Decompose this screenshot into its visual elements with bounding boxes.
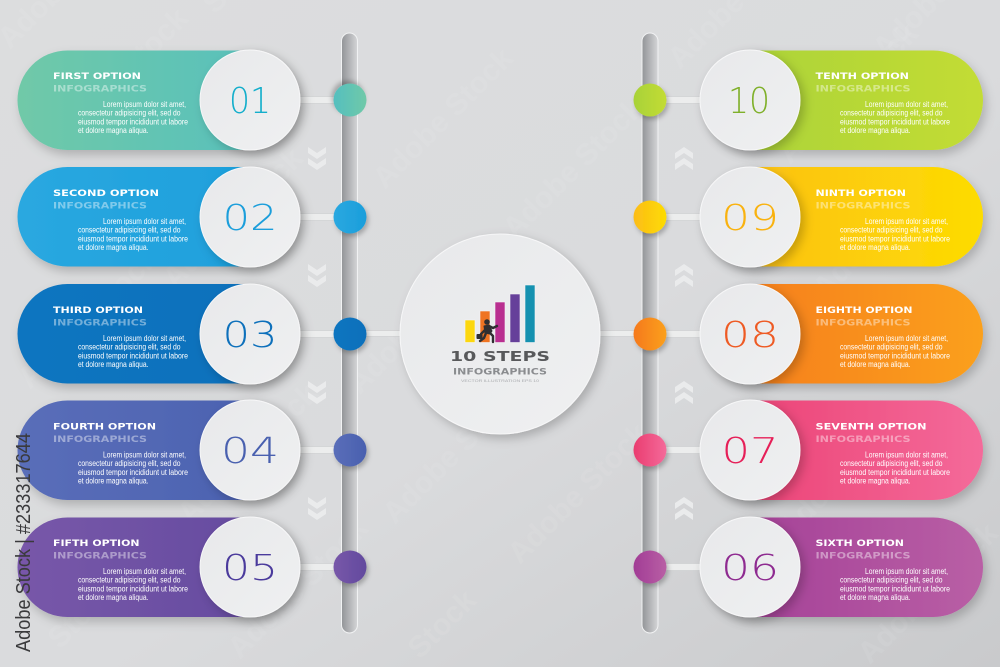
body text: eiusmod tempor incididunt ut labore [840, 117, 950, 126]
connector [660, 564, 705, 570]
body text [840, 334, 950, 369]
body text: Lorem ipsum dolor sit amet, [865, 100, 948, 109]
watermark pattern: Adobe Stock [772, 392, 925, 545]
body text [840, 100, 950, 135]
hub caption: VECTOR ILLUSTRATION EPS 10 [461, 379, 539, 383]
hub subtitle: INFOGRAPHICS [453, 368, 547, 378]
connector [295, 96, 340, 104]
badge [700, 167, 800, 267]
pill [18, 167, 298, 266]
heading: EIGHTH OPTION [816, 305, 912, 316]
body text: et dolore magna aliqua. [840, 476, 910, 486]
watermark pattern: Adobe Stock [377, 377, 530, 530]
heading: FIRST OPTION [53, 71, 141, 82]
connector [295, 214, 340, 220]
body text: et dolore magna aliqua. [78, 126, 148, 135]
pill [18, 518, 298, 617]
step 03 [18, 284, 366, 384]
body text: eiusmod tempor incididunt ut labore [78, 117, 188, 126]
body text: Lorem ipsum dolor sit amet, [103, 100, 186, 109]
body text: et dolore magna aliqua. [78, 476, 148, 486]
number: 03 [222, 315, 278, 356]
heading: SIXTH OPTION [816, 538, 904, 549]
dot [634, 84, 666, 116]
body text: et dolore magna aliqua. [840, 360, 910, 369]
step 04 [18, 400, 366, 500]
number: 10 [728, 81, 770, 122]
body text: consectetur adipisicing elit, sed do [78, 226, 181, 235]
dot [634, 550, 666, 584]
body text: Lorem ipsum dolor sit amet, [103, 567, 186, 576]
subheading: INFOGRAPHICS [816, 550, 910, 562]
heading: FOURTH OPTION [53, 422, 156, 432]
step 01 [18, 50, 366, 150]
hub disc [400, 234, 600, 434]
body text [840, 217, 950, 252]
subheading: INFOGRAPHICS [53, 84, 147, 94]
body text: consectetur adipisicing elit, sed do [78, 109, 181, 118]
badge [200, 517, 300, 617]
body text [78, 334, 188, 369]
body text: et dolore magna aliqua. [840, 126, 910, 135]
pill [18, 284, 298, 384]
step 07 [634, 400, 983, 500]
left timeline rail [342, 33, 358, 633]
pill [703, 518, 983, 617]
step 09 [634, 167, 983, 267]
connector [295, 564, 340, 570]
connector [660, 446, 705, 454]
subheading: INFOGRAPHICS [53, 550, 147, 562]
watermark pattern: Adobe Stock [222, 512, 375, 665]
pill [18, 50, 298, 150]
badge [200, 284, 300, 384]
body text [78, 567, 188, 602]
center hub [400, 234, 600, 434]
chevrons pointing up [675, 147, 693, 520]
body text: consectetur adipisicing elit, sed do [78, 576, 181, 585]
bar chart icon [465, 285, 535, 342]
body text: et dolore magna aliqua. [78, 593, 148, 602]
body text: et dolore magna aliqua. [840, 243, 910, 252]
body text: eiusmod tempor incididunt ut labore [78, 351, 188, 360]
body text: eiusmod tempor incididunt ut labore [840, 584, 950, 593]
watermark pattern: Adobe Stock [772, 17, 925, 170]
body text: consectetur adipisicing elit, sed do [840, 226, 943, 235]
body text: et dolore magna aliqua. [840, 593, 910, 602]
step 02 [18, 167, 366, 267]
badge [700, 284, 800, 384]
badge [700, 400, 800, 500]
badge [700, 517, 800, 617]
connector [295, 446, 340, 454]
heading: SEVENTH OPTION [816, 422, 926, 432]
number: 05 [222, 548, 278, 589]
body text: eiusmod tempor incididunt ut labore [840, 351, 950, 360]
heading: THIRD OPTION [53, 305, 143, 316]
connector [295, 330, 340, 338]
body text: consectetur adipisicing elit, sed do [840, 576, 943, 585]
body text: eiusmod tempor incididunt ut labore [840, 234, 950, 243]
body text: eiusmod tempor incididunt ut labore [78, 234, 188, 243]
dot [334, 318, 366, 350]
dot [334, 84, 366, 116]
subheading: INFOGRAPHICS [816, 200, 910, 212]
subheading: INFOGRAPHICS [816, 434, 910, 445]
body text: consectetur adipisicing elit, sed do [78, 343, 181, 352]
center connector lines [360, 330, 640, 336]
stock id side label: Adobe Stock | #233317644 [12, 433, 35, 652]
body text [78, 100, 188, 135]
heading: SECOND OPTION [53, 188, 159, 199]
body text [840, 450, 950, 486]
badge [200, 400, 300, 500]
body text: Lorem ipsum dolor sit amet, [103, 450, 186, 460]
heading: TENTH OPTION [816, 71, 909, 82]
body text: eiusmod tempor incididunt ut labore [840, 468, 950, 477]
pill [703, 167, 983, 266]
connector [660, 330, 705, 338]
watermark pattern: Adobe Stock [367, 42, 520, 195]
number: 08 [721, 315, 779, 356]
chevrons pointing down [308, 147, 326, 520]
number: 04 [221, 431, 279, 472]
dot [634, 318, 666, 350]
body text: Lorem ipsum dolor sit amet, [865, 217, 948, 226]
watermark pattern: Adobe Stock [157, 142, 310, 295]
body text: consectetur adipisicing elit, sed do [78, 459, 181, 468]
badge [200, 50, 300, 150]
heading: FIFTH OPTION [53, 538, 140, 549]
dot [334, 434, 366, 466]
watermark pattern: Stock [42, 574, 123, 655]
dot [334, 550, 366, 584]
step 08 [634, 284, 983, 384]
subheading: INFOGRAPHICS [53, 434, 147, 445]
watermark pattern: Adobe Stock [807, 152, 960, 305]
subheading: INFOGRAPHICS [816, 84, 910, 94]
number: 06 [721, 548, 779, 589]
number: 09 [721, 198, 779, 239]
body text [78, 217, 188, 252]
dot [634, 200, 666, 234]
badge [200, 167, 300, 267]
body text: Lorem ipsum dolor sit amet, [103, 334, 186, 343]
watermark pattern: Adobe Stock [497, 92, 650, 245]
watermark pattern: Adobe Stock [172, 377, 325, 530]
watermark pattern: Adobe Stock [42, 2, 195, 155]
dot [634, 434, 666, 466]
body text: Lorem ipsum dolor sit amet, [103, 217, 186, 226]
icon: running businessman [476, 319, 497, 342]
body text: Lorem ipsum dolor sit amet, [865, 334, 948, 343]
number: 02 [222, 198, 278, 239]
hub title: 10 STEPS [450, 349, 550, 365]
body text: Lorem ipsum dolor sit amet, [865, 567, 948, 576]
body text [840, 567, 950, 602]
watermark pattern: Adobe Stock [12, 242, 165, 395]
subheading: INFOGRAPHICS [816, 318, 910, 328]
body text: eiusmod tempor incididunt ut labore [78, 468, 188, 477]
body text: Lorem ipsum dolor sit amet, [865, 450, 948, 460]
connector [660, 96, 705, 104]
body text: eiusmod tempor incididunt ut labore [78, 584, 188, 593]
pill [703, 284, 983, 384]
watermark pattern: Adobe Stock [342, 247, 495, 400]
watermark pattern: Adobe Stock [502, 417, 655, 570]
body text [78, 450, 188, 486]
body text: consectetur adipisicing elit, sed do [840, 459, 943, 468]
right timeline rail [642, 33, 658, 633]
pill [18, 400, 298, 500]
watermark pattern: Stock [402, 584, 483, 665]
connector [660, 214, 705, 220]
step 10 [634, 50, 983, 150]
subheading: INFOGRAPHICS [53, 200, 147, 212]
badge [700, 50, 800, 150]
body text: consectetur adipisicing elit, sed do [840, 109, 943, 118]
pill [703, 50, 983, 150]
heading: NINTH OPTION [816, 188, 906, 199]
number: 01 [229, 81, 271, 122]
number: 07 [722, 431, 778, 472]
body text: consectetur adipisicing elit, sed do [840, 343, 943, 352]
body text: et dolore magna aliqua. [78, 360, 148, 369]
step 05 [18, 517, 366, 617]
step 06 [634, 517, 983, 617]
dot [334, 200, 366, 234]
pill [703, 400, 983, 500]
body text: et dolore magna aliqua. [78, 243, 148, 252]
subheading: INFOGRAPHICS [53, 318, 147, 328]
